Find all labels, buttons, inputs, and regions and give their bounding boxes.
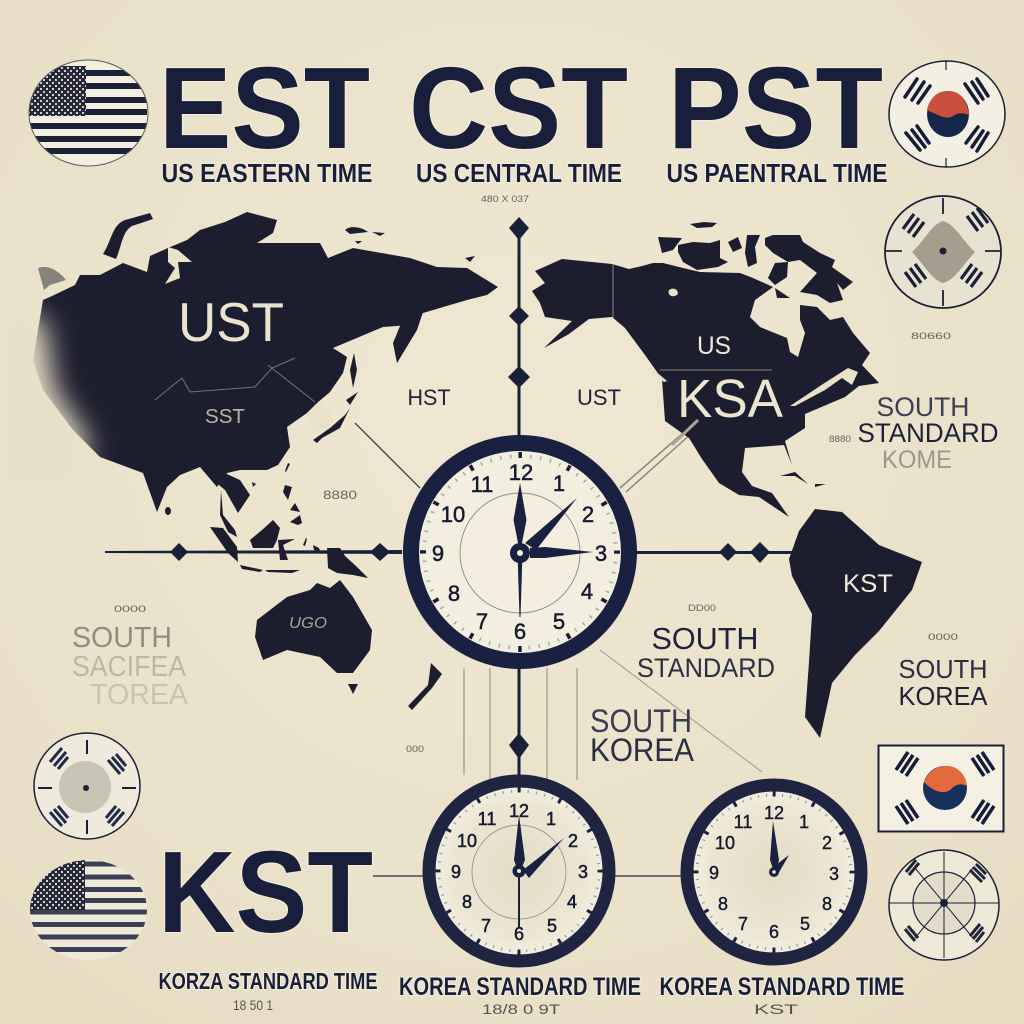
- bottom small labels: KST: [754, 1001, 799, 1017]
- clock numbers: 9: [709, 863, 719, 883]
- title subtitles: US PAENTRAL TIME: [666, 158, 888, 188]
- icon: Korean flag: [878, 746, 1004, 832]
- title: EST CST PST: CST: [409, 43, 628, 173]
- bottom captions: KOREA STANDARD TIME: [660, 973, 904, 1001]
- map labels: 480 X 037: [481, 194, 529, 204]
- clock numbers: 8: [822, 894, 832, 914]
- clock numbers: 9: [451, 862, 461, 882]
- clock numbers: [709, 803, 839, 942]
- map: Americas: [532, 222, 922, 738]
- map labels: SOUTH: [876, 392, 970, 422]
- map labels: KOREA: [898, 681, 988, 711]
- clock numbers: 11: [478, 809, 496, 829]
- clock numbers: 2: [822, 833, 832, 853]
- map labels: 8880: [829, 434, 851, 444]
- New Guinea: [327, 548, 368, 578]
- map labels: DD00: [688, 603, 716, 613]
- Korea highlight: [308, 403, 333, 432]
- Arctic islands: [658, 222, 853, 303]
- clock numbers: 5: [547, 916, 557, 936]
- map labels: SOUTH: [72, 622, 172, 654]
- clock numbers: 7: [476, 609, 488, 634]
- clock numbers: 6: [769, 922, 779, 942]
- clock numbers: 1: [799, 812, 809, 832]
- Great Lakes and gaps: [652, 289, 858, 406]
- icon: Korean emblem top right: [889, 61, 1005, 167]
- Baltic gap: [165, 247, 192, 284]
- Arctic islands Asia: [345, 227, 475, 262]
- map labels: STANDARD: [637, 653, 775, 683]
- clock numbers: 1: [553, 471, 565, 496]
- map blur left edge: [0, 310, 88, 490]
- Tasmania and New Zealand: [348, 663, 442, 710]
- title: EST CST PST: PST: [668, 43, 883, 173]
- icon: spoked emblem bottom right: [889, 850, 999, 960]
- map labels: SOUTH: [898, 654, 988, 684]
- clock numbers: 6: [514, 619, 526, 644]
- clock numbers: [451, 801, 588, 944]
- Indonesia: [210, 520, 320, 573]
- UK islands grey: [38, 267, 66, 290]
- Alaska border and KSA rule: [613, 264, 772, 370]
- clock hands: [514, 483, 593, 617]
- map labels: UST: [577, 385, 621, 410]
- map labels: SOUTH: [652, 621, 758, 656]
- clock numbers: 6: [514, 924, 524, 944]
- map: inner borders on Asia: [155, 358, 315, 402]
- clock numbers: 12: [764, 803, 784, 823]
- main clock: [411, 443, 629, 661]
- title: EST CST PST: [159, 43, 883, 173]
- map labels: [72, 194, 998, 768]
- map labels: US: [697, 332, 731, 360]
- title subtitles: US EASTERN TIME: [162, 158, 372, 188]
- bottom small labels: [233, 997, 799, 1017]
- clock numbers: 3: [829, 864, 839, 884]
- clock numbers: 8: [462, 892, 472, 912]
- heading: KST: KST: [158, 827, 373, 957]
- clock numbers: 8: [448, 581, 460, 606]
- clock numbers: 10: [441, 502, 465, 527]
- clock numbers: 4: [581, 579, 593, 604]
- clock numbers: 7: [738, 914, 748, 934]
- clock bottom right: [687, 785, 861, 959]
- Caribbean: [780, 472, 826, 487]
- icon: US flag top: [28, 60, 148, 166]
- clock numbers: 1: [546, 809, 556, 829]
- clock numbers: 2: [568, 831, 578, 851]
- clock numbers: 9: [432, 541, 444, 566]
- Philippines: [283, 463, 302, 525]
- clock numbers: 11: [471, 472, 493, 497]
- map labels: 000: [406, 744, 424, 754]
- clock bottom left: [429, 781, 609, 961]
- clock numbers: 2: [582, 502, 594, 527]
- map labels: TOREA: [90, 679, 189, 711]
- clock numbers: 7: [481, 916, 491, 936]
- Indochina and Malay: [218, 470, 250, 537]
- map labels: KOME: [882, 446, 952, 474]
- clock numbers: 12: [509, 801, 529, 821]
- bottom small labels: 18 50 1: [233, 997, 273, 1013]
- Scandinavia: [103, 213, 153, 259]
- bottom captions: KOREA STANDARD TIME: [399, 973, 641, 1001]
- clock numbers: 5: [553, 609, 565, 634]
- Kamchatka and Sakhalin: [350, 312, 423, 388]
- map labels: SST: [205, 406, 245, 428]
- icon: compass emblem right: [885, 196, 1001, 308]
- title subtitles: US CENTRAL TIME: [416, 158, 622, 188]
- title: EST CST PST: EST: [159, 43, 370, 173]
- clock hands: [514, 815, 564, 928]
- clock numbers: 3: [595, 541, 607, 566]
- South America: [789, 509, 922, 738]
- Sri Lanka and Hainan: [165, 482, 256, 515]
- icon: US flag bottom: [30, 860, 147, 960]
- bottom captions: KORZA STANDARD TIME: [158, 968, 378, 994]
- map labels: SOUTH: [590, 703, 692, 739]
- clock numbers: 11: [734, 812, 752, 832]
- map labels: KSA: [677, 369, 783, 429]
- map labels: KOREA: [590, 732, 695, 768]
- clock numbers: 8: [718, 894, 728, 914]
- bottom small labels: 18/8 0 9T: [482, 1001, 561, 1017]
- connector lines: [105, 217, 830, 876]
- map labels: KST: [843, 570, 893, 598]
- icon: emblem left: [34, 733, 140, 839]
- clock numbers: 10: [457, 831, 477, 851]
- Australia: [255, 580, 372, 673]
- Eurasia landmass: [33, 212, 498, 512]
- North America: [532, 259, 879, 517]
- clock numbers: 10: [715, 833, 735, 853]
- bottom captions: [158, 968, 904, 1001]
- clock numbers: 4: [567, 892, 577, 912]
- map: Asia and Australia: [33, 212, 498, 710]
- map labels: 80660: [911, 331, 951, 341]
- clock hands: [770, 821, 789, 875]
- pointer over North America: [672, 420, 698, 445]
- map labels: 8880: [323, 488, 357, 502]
- Japan: [313, 392, 358, 443]
- title subtitles: [162, 158, 888, 188]
- clock numbers: 3: [578, 862, 588, 882]
- map labels: UGO: [289, 615, 327, 632]
- clock numbers: [432, 460, 607, 644]
- map labels: STANDARD: [858, 418, 998, 448]
- clock numbers: 12: [509, 460, 533, 485]
- map labels: 0000: [114, 604, 146, 614]
- map labels: UST: [178, 291, 284, 353]
- clock numbers: 5: [800, 914, 810, 934]
- map labels: 0000: [928, 632, 958, 642]
- map labels: HST: [408, 385, 450, 410]
- map labels: SACIFEA: [72, 651, 187, 683]
